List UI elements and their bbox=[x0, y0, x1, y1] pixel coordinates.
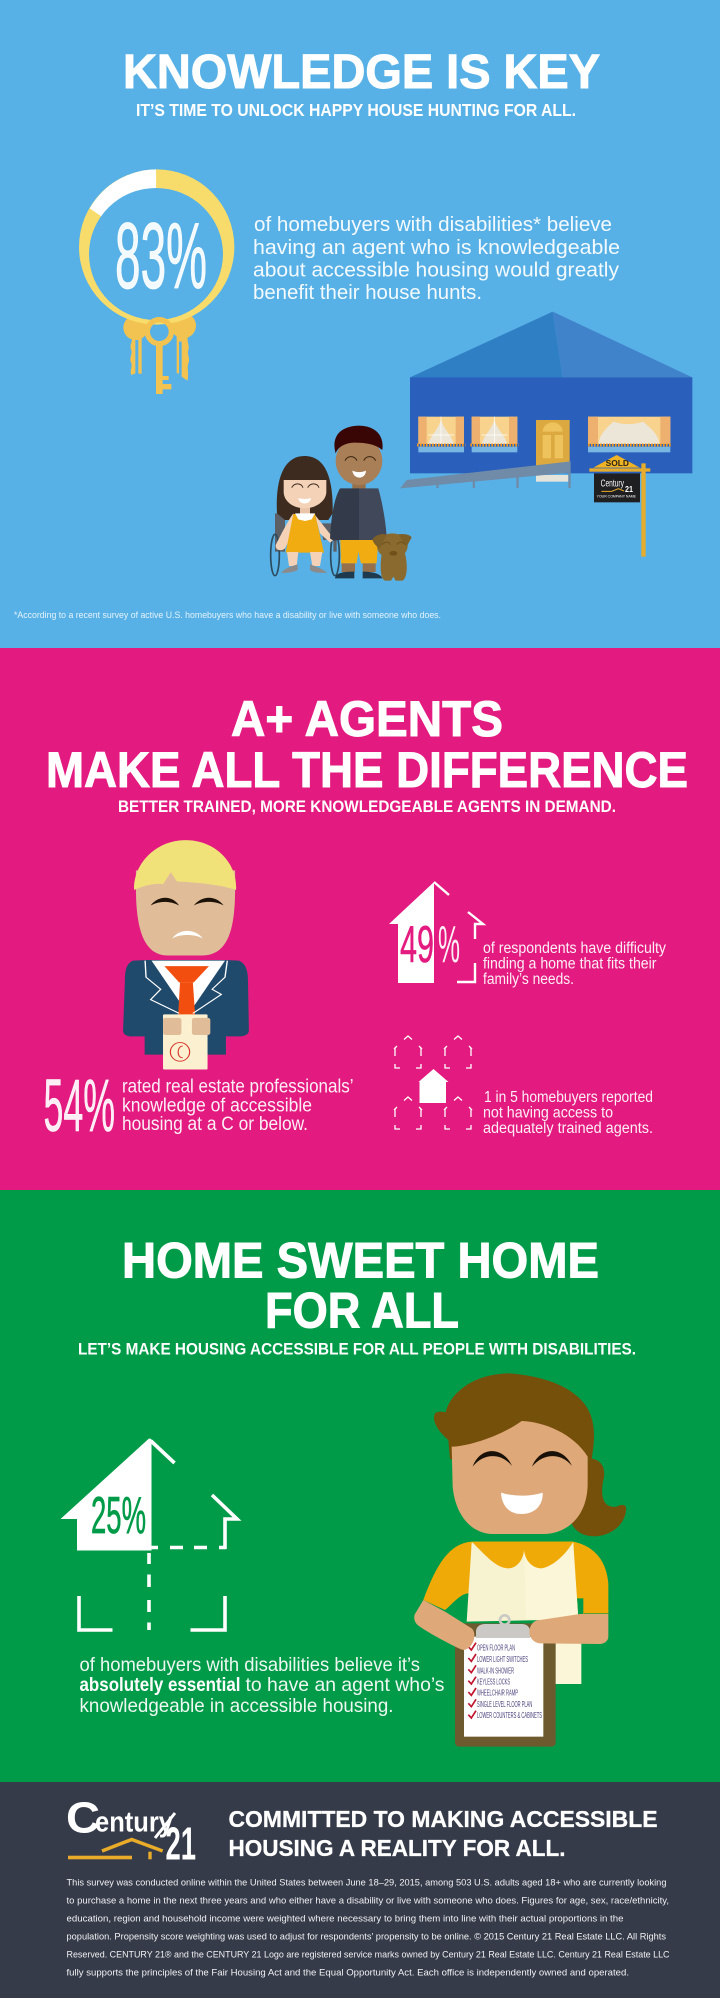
checklist: LOWER LIGHT SWITCHES bbox=[477, 1654, 528, 1664]
smile bbox=[501, 1493, 543, 1514]
eyes bbox=[151, 898, 224, 906]
sold sign: 21 bbox=[625, 484, 633, 494]
survey fine print: to purchase a home in the next three years and who either have a disability or live with someone who does. Figures for age, sex, race/ethnicity, bbox=[66, 1896, 669, 1906]
illustration: smiling agent with checklist: LOWER COUNTERS & CABINETS bbox=[477, 1710, 542, 1720]
stat 25% description: knowledgeable in accessible housing. bbox=[80, 1695, 394, 1717]
panel: knowledge is key bbox=[0, 0, 720, 648]
icon: key ring gauge with keys bbox=[79, 169, 234, 394]
illustration: smiling agent with checklist bbox=[414, 1373, 626, 1747]
panel: a+ agents: 54% bbox=[44, 1064, 115, 1147]
icon: house 49%: 49 bbox=[400, 916, 434, 974]
steps bbox=[536, 475, 568, 482]
checklist: SINGLE LEVEL FLOOR PLAN bbox=[477, 1699, 532, 1709]
illustration: sad agent with C grade bbox=[123, 840, 249, 1069]
sold sign bbox=[589, 455, 650, 557]
heading: FOR ALL bbox=[265, 1282, 459, 1338]
closing headline bbox=[228, 1806, 658, 1861]
stat description bbox=[253, 214, 620, 304]
left arm bbox=[414, 1600, 474, 1650]
eyes bbox=[473, 1451, 572, 1467]
hair bbox=[434, 1373, 594, 1460]
heading bbox=[122, 1232, 599, 1338]
panel: home sweet home bbox=[0, 1190, 720, 1782]
stat one in five description bbox=[483, 1089, 653, 1137]
checklist: WALK-IN SHOWER bbox=[477, 1665, 514, 1675]
stat 49% description: of respondents have difficulty bbox=[483, 940, 666, 957]
survey fine print: education, region and household income were weighted where necessary to bring them into line with their actual proportions in the bbox=[66, 1914, 624, 1924]
sold sign: Century bbox=[601, 479, 624, 490]
illustration: house bbox=[400, 312, 692, 557]
icon: house 49%: % bbox=[438, 916, 460, 974]
survey fine print: fully supports the principles of the Fair Housing Act and the Equal Opportunity Act. Each office is independently owned and operated. bbox=[66, 1968, 629, 1978]
closing headline: COMMITTED TO MAKING ACCESSIBLE bbox=[228, 1806, 658, 1832]
subtitle: BETTER TRAINED, MORE KNOWLEDGEABLE AGENTS IN DEMAND. bbox=[118, 797, 616, 816]
sold sign: SOLD bbox=[606, 459, 629, 468]
frown bbox=[172, 931, 203, 939]
sold sign: YOUR COMPANY NAME bbox=[597, 494, 637, 498]
stat 54% description bbox=[122, 1076, 354, 1135]
logo: century 21: entury bbox=[95, 1806, 173, 1838]
man bbox=[330, 426, 387, 578]
apron bbox=[467, 1543, 581, 1684]
right arm bbox=[529, 1614, 608, 1644]
face bbox=[452, 1421, 588, 1534]
logo: century 21: 21 bbox=[166, 1817, 196, 1869]
report card bbox=[163, 1014, 210, 1069]
stat 54% description: knowledge of accessible bbox=[122, 1096, 312, 1116]
illustration: family with wheelchair and dog bbox=[271, 426, 412, 581]
panel: a+ agents bbox=[0, 648, 720, 1190]
stat 49% description: finding a home that fits their bbox=[483, 956, 656, 972]
checklist: KEYLESS LOCKS bbox=[477, 1676, 510, 1686]
checklist: WHEELCHAIR RAMP bbox=[477, 1688, 518, 1698]
tie bbox=[164, 966, 209, 1015]
panel: knowledge is key: 83% bbox=[115, 203, 207, 308]
icon: house 49% bbox=[389, 882, 483, 983]
blouse bbox=[423, 1542, 608, 1619]
windows bbox=[417, 417, 671, 452]
closing headline: HOUSING A REALITY FOR ALL. bbox=[228, 1835, 566, 1861]
stat 25% description bbox=[80, 1654, 445, 1717]
stat 49% description bbox=[483, 940, 666, 988]
door bbox=[536, 420, 570, 467]
stat description: having an agent who is knowledgeable bbox=[253, 237, 620, 259]
checklist bbox=[468, 1643, 542, 1720]
heading: HOME SWEET HOME bbox=[122, 1232, 599, 1288]
left key bbox=[123, 315, 148, 375]
stat description: benefit their house hunts. bbox=[253, 282, 482, 304]
logo: century 21 bbox=[66, 1794, 196, 1869]
stat 25% description: absolutely essential bbox=[80, 1674, 240, 1696]
center key bbox=[147, 320, 171, 394]
collar bbox=[472, 1542, 573, 1568]
stat 49% description: family’s needs. bbox=[483, 971, 574, 988]
title: KNOWLEDGE IS KEY bbox=[123, 46, 600, 99]
icon: one in five houses bbox=[394, 1036, 472, 1129]
wheelchair ramp bbox=[400, 461, 571, 488]
girl in wheelchair bbox=[271, 456, 339, 576]
face bbox=[136, 870, 235, 955]
icon: quarter house 25% bbox=[60, 1438, 237, 1630]
stat 54% description: rated real estate professionals’ bbox=[122, 1076, 354, 1098]
stat one in five description: 1 in 5 homebuyers reported bbox=[484, 1089, 653, 1106]
ring gauge bbox=[79, 169, 234, 325]
heading: A+ AGENTS bbox=[231, 691, 503, 747]
checklist: OPEN FLOOR PLAN bbox=[477, 1643, 515, 1653]
stat one in five description: not having access to bbox=[483, 1104, 613, 1122]
heading bbox=[46, 691, 688, 798]
stat 25% description: to have an agent who’s bbox=[246, 1674, 445, 1696]
panel: footer bbox=[0, 1782, 720, 1998]
stat description: of homebuyers with disabilities* believe bbox=[254, 214, 612, 236]
subtitle: IT’S TIME TO UNLOCK HAPPY HOUSE HUNTING FOR ALL. bbox=[136, 100, 576, 120]
survey fine print: This survey was conducted online within the United States between June 18–29, 2015, among 503 U.S. adults aged 18+ who are currently looking bbox=[66, 1878, 666, 1888]
survey fine print: Reserved. CENTURY 21® and the CENTURY 21 Logo are registered service marks owned by Century 21 Real Estate LLC. Century 21 Real Estate LLC bbox=[66, 1950, 670, 1960]
walls bbox=[410, 377, 692, 473]
stat one in five description: adequately trained agents. bbox=[483, 1120, 653, 1137]
subtitle: LET’S MAKE HOUSING ACCESSIBLE FOR ALL PEOPLE WITH DISABILITIES. bbox=[78, 1339, 636, 1358]
roof bbox=[410, 312, 692, 377]
jacket bbox=[123, 960, 249, 1055]
right key bbox=[171, 313, 196, 381]
stat 25% description: of homebuyers with disabilities believe it’s bbox=[80, 1654, 420, 1676]
dog bbox=[372, 533, 412, 581]
stat description: about accessible housing would greatly bbox=[253, 260, 619, 282]
footnote: *According to a recent survey of active U.S. homebuyers who have a disability or live with someone who does. bbox=[14, 610, 441, 620]
shirt bbox=[152, 961, 225, 1014]
logo: century 21: C bbox=[66, 1794, 100, 1842]
survey fine print bbox=[66, 1878, 670, 1978]
clipboard bbox=[455, 1615, 556, 1747]
icon: quarter house 25%: 25% bbox=[91, 1487, 146, 1545]
ponytail bbox=[572, 1458, 626, 1536]
stat 54% description: housing at a C or below. bbox=[122, 1114, 308, 1135]
hair bbox=[134, 840, 236, 890]
survey fine print: population. Propensity score weighting was used to adjust for respondents’ propensity to be online. © 2015 Century 21 Real Estate LLC. All Rights bbox=[66, 1932, 666, 1942]
